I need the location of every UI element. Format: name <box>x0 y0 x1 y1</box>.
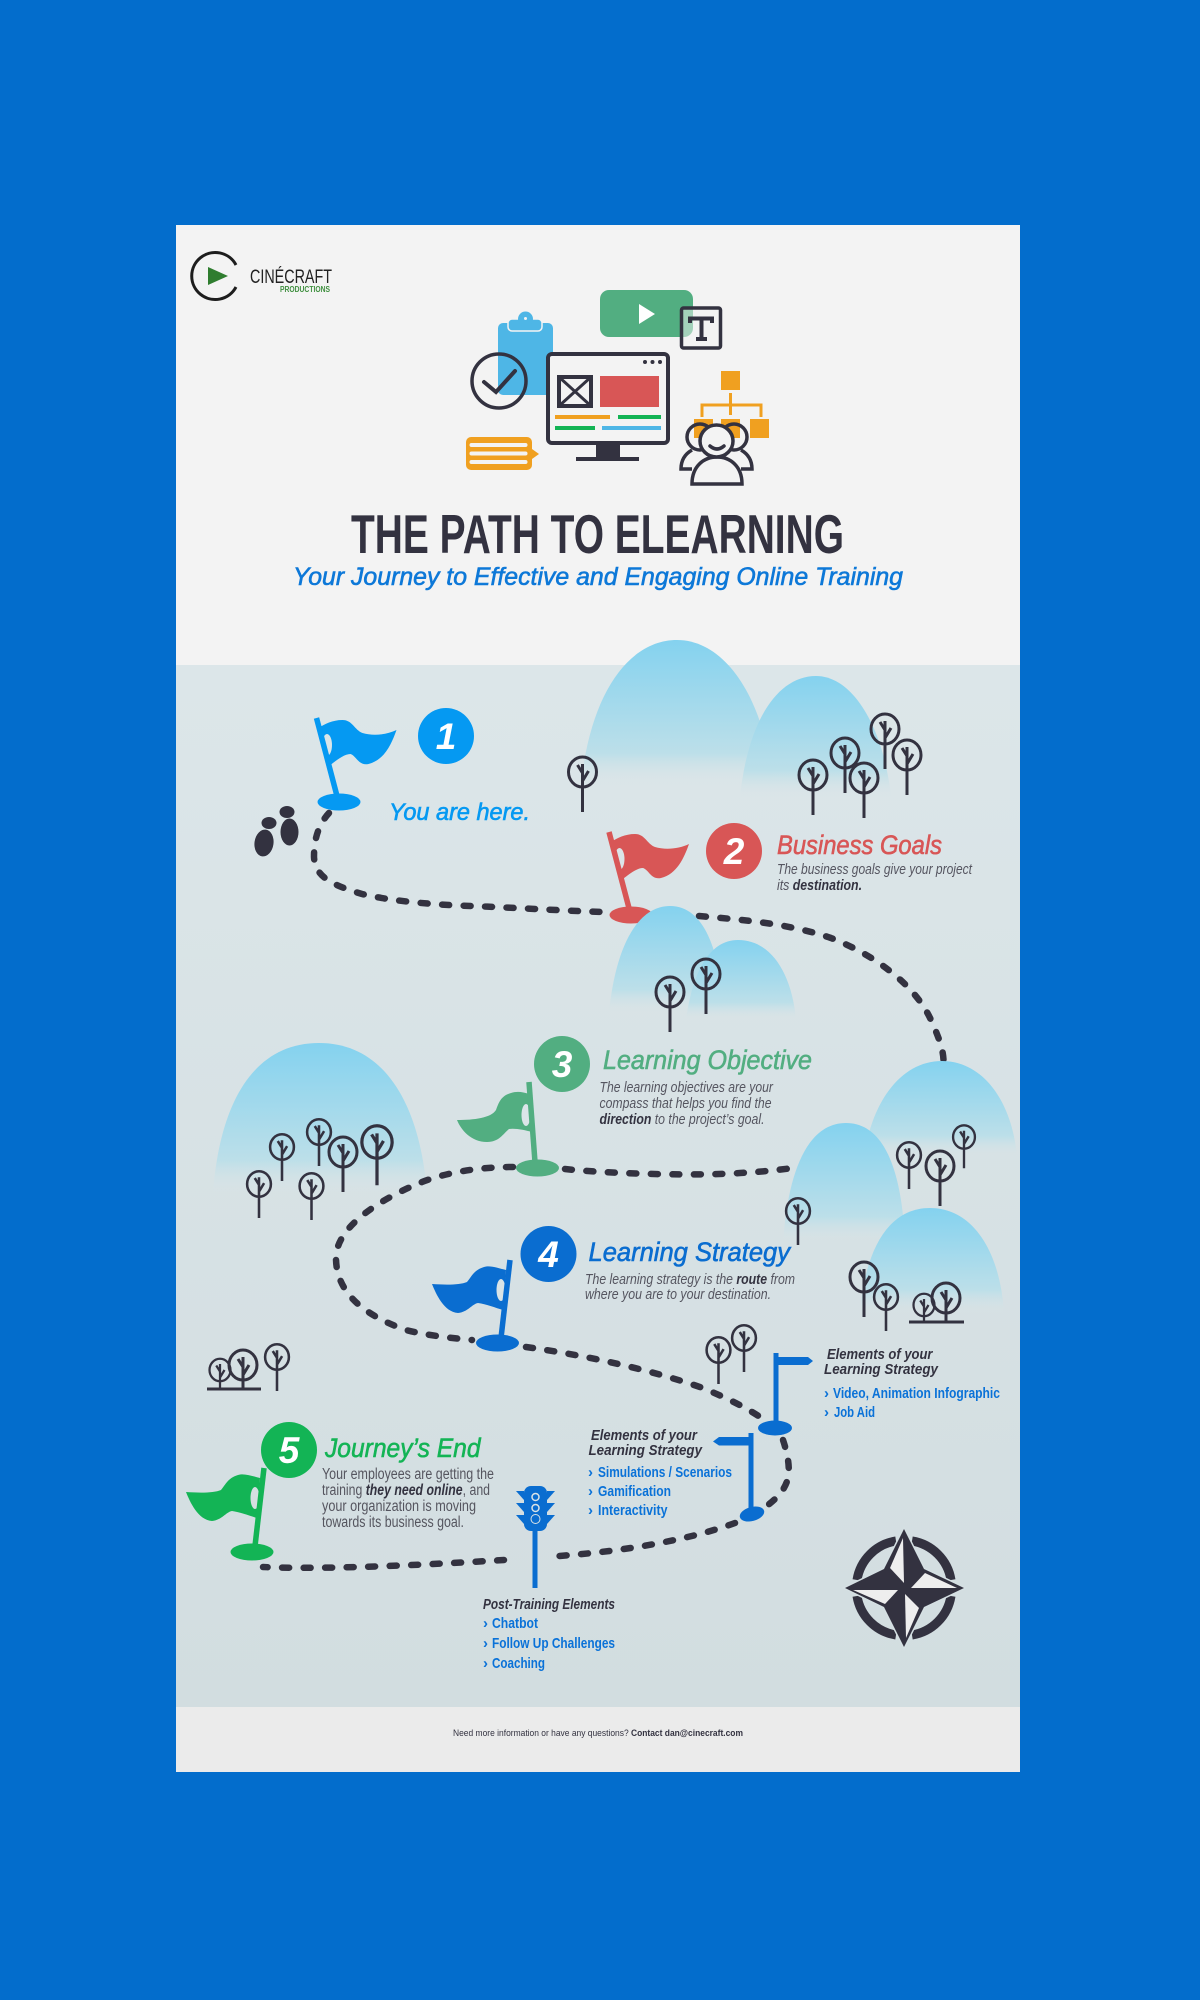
icon: traffic light <box>516 1486 555 1588</box>
flag 5: journey's end <box>186 1468 274 1560</box>
step 5: journey's end: 5 <box>279 1430 301 1471</box>
icon: check mark circle <box>472 354 526 408</box>
logo: Cinecraft: CINÉCRAFT <box>250 267 332 288</box>
icon: computer monitor <box>548 354 668 461</box>
list: elements of strategy, right: Video, Animation Infographic <box>833 1385 1000 1402</box>
step 3: learning objective: direction to the project’s goal. <box>600 1112 764 1128</box>
step 3: learning objective: The learning objectives are your <box>600 1080 774 1096</box>
list: elements of strategy, right: Job Aid <box>834 1404 875 1421</box>
step 2: business goals: Business Goals <box>777 830 942 860</box>
step 1: you are here <box>389 708 530 826</box>
list: post-training elements: Coaching <box>492 1655 545 1672</box>
signpost: middle <box>713 1433 766 1524</box>
step 1: you are here: 1 <box>436 716 456 757</box>
subtitle: Your Journey to Effective and Engaging Online Training <box>293 563 903 591</box>
step 5: journey's end: Journey’s End <box>324 1433 481 1463</box>
flag 4: learning strategy <box>432 1260 519 1352</box>
step 5: journey's end: towards its business goal. <box>322 1514 464 1531</box>
list: elements of strategy, right: › <box>824 1404 829 1421</box>
list: post-training elements <box>483 1596 615 1672</box>
list: post-training elements: Follow Up Challenges <box>492 1635 615 1652</box>
list: elements of strategy, middle: › <box>588 1464 593 1481</box>
step 2: business goals: its destination. <box>777 878 862 894</box>
step 3: learning objective <box>534 1036 812 1128</box>
hills <box>581 640 1017 1313</box>
footer contact text: Need more information or have any questions? Contact dan@cinecraft.com <box>453 1728 743 1739</box>
icon: compass <box>845 1529 964 1647</box>
step 3: learning objective: Learning Objective <box>603 1045 812 1075</box>
title: THE PATH TO ELEARNING <box>351 503 844 565</box>
list: elements of strategy, middle: › <box>588 1502 593 1519</box>
step 5: journey's end <box>261 1422 494 1531</box>
list: post-training elements: › <box>483 1635 488 1652</box>
flag 1: you are here <box>316 718 396 810</box>
icon: clipboard <box>498 312 553 395</box>
list: elements of strategy, middle: Learning Strategy <box>588 1442 703 1459</box>
logo: Cinecraft <box>192 252 332 300</box>
trees <box>207 714 975 1391</box>
list: elements of strategy, middle: Simulations / Scenarios <box>598 1464 732 1481</box>
step 2: business goals <box>706 823 973 894</box>
step 4: learning strategy: Learning Strategy <box>588 1237 791 1267</box>
panel: poster background <box>176 225 1020 1772</box>
list: elements of strategy, middle: Interactivity <box>598 1502 668 1519</box>
step 5: journey's end: Your employees are getting the <box>322 1466 494 1483</box>
icon: text box <box>682 308 720 348</box>
list: post-training elements: › <box>483 1655 488 1672</box>
step 1: you are here: You are here. <box>389 799 530 826</box>
icon: team of people <box>681 424 752 484</box>
step 2: business goals: 2 <box>723 831 745 872</box>
panel: footer band <box>176 1707 1020 1772</box>
hill: left <box>213 1043 427 1193</box>
step 5: journey's end: your organization is moving <box>322 1498 476 1515</box>
step 5: journey's end: training they need online, and <box>322 1482 490 1499</box>
illustration: eLearning icons <box>466 290 769 484</box>
list: elements of strategy, right: › <box>824 1385 829 1402</box>
list: post-training elements: Chatbot <box>492 1615 538 1632</box>
signpost: right <box>758 1353 813 1436</box>
step 2: business goals: The business goals give your project <box>777 862 973 878</box>
list: elements of strategy, middle <box>588 1427 732 1519</box>
icon: org chart <box>694 371 769 438</box>
list: elements of strategy, right: Elements of your <box>827 1346 933 1363</box>
list: post-training elements: › <box>483 1615 488 1632</box>
step 4: learning strategy: where you are to your destination. <box>585 1287 771 1303</box>
icon: chat bubble <box>466 437 539 470</box>
step 4: learning strategy: 4 <box>537 1234 559 1275</box>
panel: map section <box>176 665 1020 1707</box>
footprints <box>253 806 298 858</box>
step 4: learning strategy: The learning strategy is the route from <box>585 1272 795 1288</box>
icon: video player <box>600 290 693 337</box>
step 3: learning objective: 3 <box>552 1044 573 1085</box>
logo: Cinecraft: PRODUCTIONS <box>280 285 331 294</box>
step 4: learning strategy <box>520 1226 795 1303</box>
flag 3: learning objective <box>457 1082 559 1176</box>
dashed journey path <box>263 813 944 1568</box>
list: elements of strategy, middle: Gamification <box>598 1483 671 1500</box>
list: elements of strategy, middle: › <box>588 1483 593 1500</box>
flag 2: business goals <box>609 832 689 924</box>
list: elements of strategy, right: Learning Strategy <box>824 1361 939 1378</box>
step 3: learning objective: compass that helps you find the <box>600 1096 772 1112</box>
list: elements of strategy, middle: Elements of your <box>591 1427 698 1444</box>
list: post-training elements: Post-Training Elements <box>483 1596 615 1613</box>
list: elements of strategy, right <box>824 1346 1000 1421</box>
